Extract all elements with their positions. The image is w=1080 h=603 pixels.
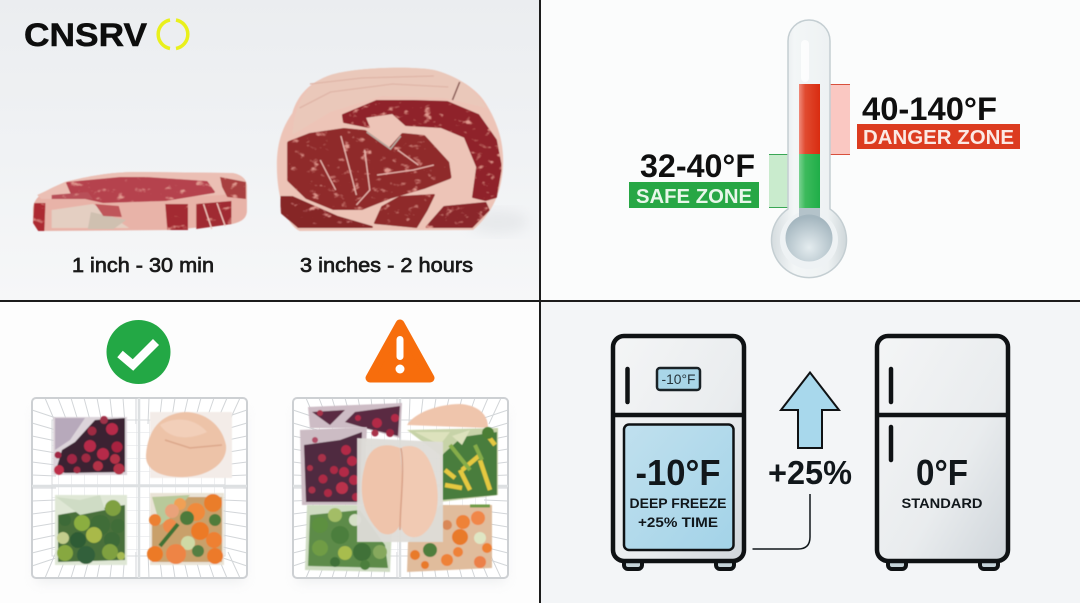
fridge handle xyxy=(625,369,630,402)
fridge feet xyxy=(888,558,998,569)
basket wires xyxy=(293,398,508,578)
shadow beside roast xyxy=(468,210,528,234)
bag: berries xyxy=(53,416,127,475)
bag: chicken xyxy=(146,412,232,478)
label: safe zone: SAFE ZONE xyxy=(636,186,752,208)
label: 32-40F: 32-40°F xyxy=(640,148,755,184)
label: 40-140F: 40-140°F xyxy=(862,91,997,127)
digital display xyxy=(657,368,700,390)
label: standard: STANDARD xyxy=(902,495,982,511)
label: danger zone: DANGER ZONE xyxy=(863,127,1014,149)
photo: one inch steak xyxy=(33,68,503,231)
icon: thermometer xyxy=(772,20,847,278)
fridge body xyxy=(613,336,744,561)
temperature: 0F: 0°F xyxy=(916,452,968,493)
bag: carrots xyxy=(407,505,492,572)
icon: warning triangle xyxy=(370,324,430,378)
bag: back berries xyxy=(308,403,402,438)
safe band xyxy=(769,154,788,208)
digital display: -10°F xyxy=(662,371,696,387)
label: 1 inch: 1 inch - 30 min xyxy=(72,255,214,277)
overpacked basket xyxy=(293,398,508,582)
temperature: -10F: -10°F xyxy=(636,452,720,493)
panel: freezer comparison xyxy=(540,301,1080,603)
blue door panel xyxy=(624,424,734,550)
label: deep freeze: DEEP FREEZE xyxy=(630,495,726,511)
label: +25%: +25% xyxy=(768,454,852,491)
panel: meat thickness xyxy=(0,0,540,301)
logo: CNSRV xyxy=(24,17,188,53)
panel: basket loading xyxy=(0,301,540,603)
basket wires xyxy=(32,398,247,578)
deep freeze fridge xyxy=(613,336,744,569)
bag: back chicken xyxy=(407,404,488,428)
bag: front berries xyxy=(300,427,367,505)
bag: front chicken xyxy=(357,438,443,542)
label: 3 inches: 3 inches - 2 hours xyxy=(300,255,473,277)
icon: green check xyxy=(106,320,170,384)
bag: green vegetables xyxy=(407,427,498,502)
fridge handles xyxy=(889,369,893,460)
fridge body xyxy=(877,336,1008,561)
fridge feet xyxy=(624,558,734,569)
bag: broccoli xyxy=(55,495,127,565)
standard fridge xyxy=(877,336,1008,569)
bag: broccoli xyxy=(305,505,393,572)
connector line xyxy=(752,494,810,549)
photo: three inch roast xyxy=(277,68,503,231)
organised basket xyxy=(32,398,247,582)
bag: mixed vegetables xyxy=(147,493,224,565)
panel: temperature zones xyxy=(540,0,1080,301)
danger band xyxy=(830,84,850,155)
label: +25% time: +25% TIME xyxy=(638,514,718,530)
arrow: up xyxy=(781,372,839,448)
logo: CNSRV: CNSRV xyxy=(24,17,148,53)
